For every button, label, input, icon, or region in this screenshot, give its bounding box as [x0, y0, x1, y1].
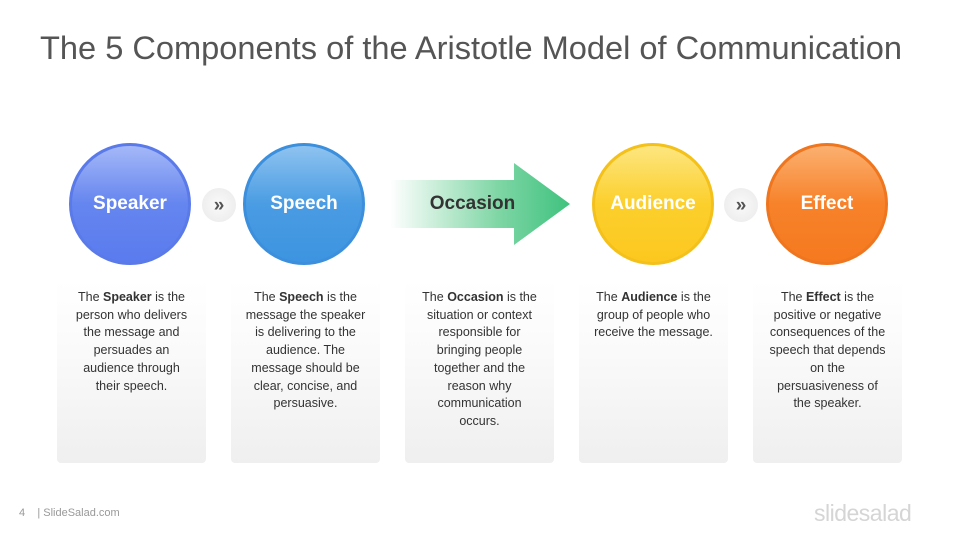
circle: Speech: Speech	[270, 193, 338, 214]
title: The 5 Components of the Aristotle Model of Communication	[40, 29, 902, 66]
panel: Audience	[579, 280, 728, 463]
circle: Audience	[592, 143, 714, 265]
circle: Speech	[243, 143, 365, 265]
chevron 1	[202, 188, 236, 222]
panel: Effect: The Effect is the positive or negative consequences of the speech that depends on the persuasiveness of the speaker.	[769, 290, 886, 410]
panel: Speaker	[57, 280, 206, 463]
footer: logo: slidesalad	[814, 500, 911, 526]
footer: page number: 4 | SlideSalad.com	[19, 507, 120, 519]
arrow: Occasion	[397, 163, 570, 245]
panel: Occasion	[405, 280, 554, 463]
circle: Speaker	[69, 143, 191, 265]
circle: Audience: Audience	[610, 193, 696, 214]
arrow: Occasion: Occasion	[430, 193, 515, 214]
panel: Audience: The Audience is the group of people who receive the message.	[594, 290, 713, 339]
panel: Speech	[231, 280, 380, 463]
chevron 2	[724, 188, 758, 222]
panel: Speech: The Speech is the message the speaker is delivering to the audience. The message should be clear, concise, and persuasive.	[246, 290, 365, 410]
panel: Speaker: The Speaker is the person who delivers the message and persuades an audience through their speech.	[76, 290, 187, 393]
chevron 1: »	[214, 194, 224, 216]
circle: Effect: Effect	[801, 193, 853, 214]
panel: Occasion: The Occasion is the situation or context responsible for bringing people together and the reason why communication occurs.	[422, 290, 537, 428]
circle: Effect	[766, 143, 888, 265]
circle: Speaker: Speaker	[93, 193, 167, 214]
panel: Effect	[753, 280, 902, 463]
chevron 2: »	[736, 194, 746, 216]
